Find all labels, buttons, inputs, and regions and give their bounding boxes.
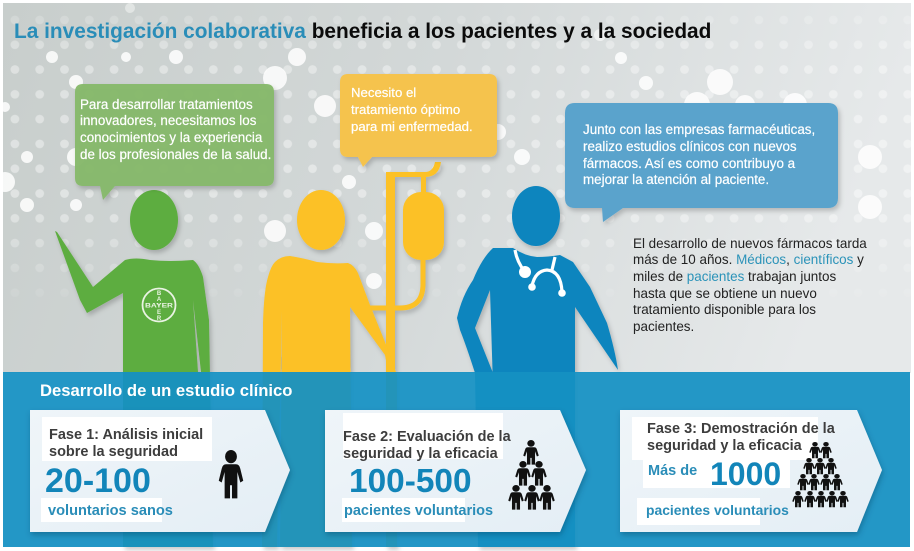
speech bubble: blue: fármacos. Así es como contribuyo a: [583, 156, 796, 171]
text block: development explanation: [633, 236, 867, 334]
panel: phase 1 arrow: sobre la seguridad: [49, 444, 178, 460]
panel: clinical study band: [3, 372, 910, 547]
speech bubble: yellow: Necesito el: [351, 85, 416, 100]
panel: phase 2 arrow: Fase 2: Evaluación de la: [343, 429, 512, 445]
panel: phase 2 arrow: seguridad y la eficacia: [343, 446, 499, 462]
icon: stethoscope: [515, 250, 566, 297]
panel: phase 3 arrow: seguridad y la eficacia: [647, 438, 803, 454]
panel: phase 2 arrow: pacientes voluntarios: [344, 503, 493, 519]
icon: group of fourteen people: [792, 442, 849, 507]
icon: group of six people: [508, 440, 555, 510]
panel: phase 3 arrow: Fase 3: Demostración de la: [647, 421, 836, 437]
speech bubble: blue: Junto con las empresas farmacéuticas,: [583, 122, 815, 137]
panel: phase 1 arrow: Fase 1: Análisis inicial: [49, 427, 203, 443]
icon: IV pole and bag: [370, 162, 444, 547]
panel: phase 1 arrow: 20-100: [45, 462, 151, 500]
speech bubble: blue: [565, 103, 838, 222]
title: La investigación colaborativa beneficia a los pacientes y a la sociedad: [14, 20, 711, 43]
text block: development explanation: hasta que se obtiene un nuevo: [633, 286, 817, 301]
yellow head: [297, 190, 345, 250]
panel: phase 3 arrow: Más de: [648, 463, 697, 479]
icon: Bayer logo: BAYER: [145, 302, 173, 310]
panel: phase 3 arrow: 1000: [710, 456, 781, 492]
speech bubble: green: Para desarrollar tratamientos: [80, 97, 253, 112]
speech bubble: green: [75, 84, 274, 200]
speech bubble: blue: mejorar la atención al paciente.: [583, 172, 769, 187]
icon: one person: [219, 450, 243, 498]
figure: yellow patient with IV drip: [262, 162, 444, 547]
blue head: [512, 186, 560, 246]
figure: blue doctor with stethoscope: [457, 186, 618, 547]
icon: green head: [130, 190, 178, 250]
panel: phase 1 arrow: [30, 410, 290, 532]
panel: phase 1 arrow: voluntarios sanos: [48, 503, 173, 519]
speech bubble: yellow: tratamiento óptimo: [351, 102, 460, 117]
figure: green person with Bayer logo: [55, 190, 213, 547]
icon: Bayer logo: [142, 288, 176, 322]
text block: development explanation: más de 10 años. Médicos, científicos y: [633, 252, 864, 267]
text block: development explanation: El desarrollo de nuevos fármacos tarda: [633, 236, 867, 251]
heading: clinical study: Desarrollo de un estudio clínico: [40, 381, 292, 400]
speech bubble: yellow: para mi enfermedad.: [351, 119, 473, 134]
text block: development explanation: miles de pacientes trabajan juntos: [633, 269, 836, 284]
blue body: [457, 248, 618, 547]
green body: [55, 231, 213, 547]
text block: development explanation: tratamiento disponible para los: [633, 302, 816, 317]
background panel with dots: [0, 3, 911, 373]
speech bubble: blue: realizo estudios clínicos con nuevos: [583, 139, 797, 154]
panel: phase 3 arrow: [620, 410, 882, 532]
speech bubble: green: de los profesionales de la salud.: [80, 147, 271, 162]
panel: phase 2 arrow: [325, 410, 586, 532]
speech bubble: green: conocimientos y la experiencia: [80, 130, 263, 145]
speech bubble: yellow: [340, 74, 497, 167]
icon: Bayer logo: BAYER: [157, 291, 162, 322]
speech bubble: green: innovadores, necesitamos los: [80, 113, 257, 128]
yellow body: [262, 256, 397, 547]
text block: development explanation: pacientes.: [633, 319, 694, 334]
panel: phase 3 arrow: pacientes voluntarios: [646, 502, 789, 518]
panel: phase 2 arrow: 100-500: [349, 463, 472, 500]
